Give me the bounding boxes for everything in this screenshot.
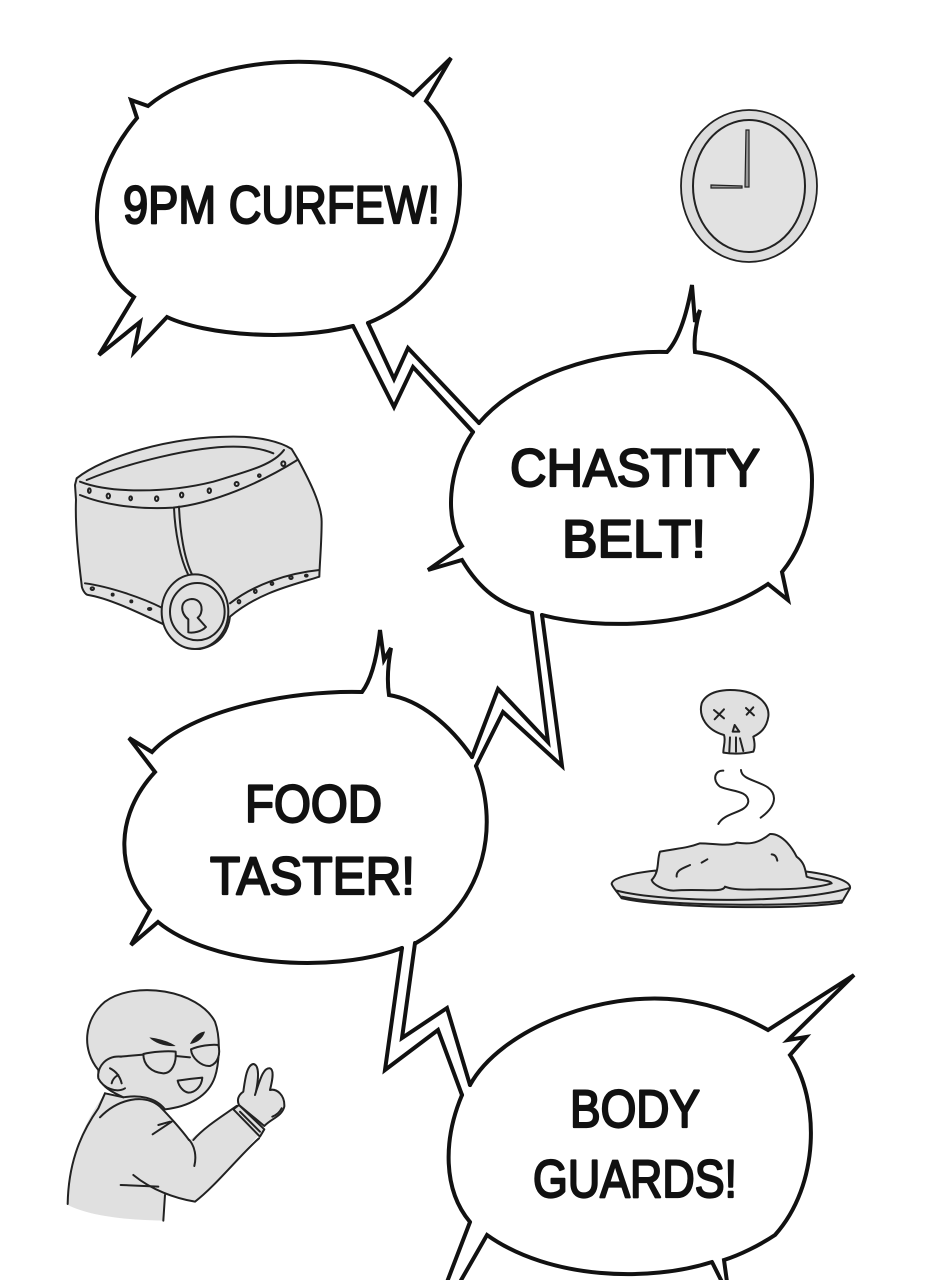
icon: poisoned food with skull <box>612 690 850 907</box>
heading: 9pm curfew: 9PM CURFEW! <box>123 176 440 235</box>
cuff <box>233 1105 264 1137</box>
brows <box>149 1037 176 1046</box>
body <box>68 1093 263 1221</box>
icon: clock <box>681 110 817 262</box>
heading: guards: GUARDS! <box>533 1150 737 1209</box>
head <box>87 990 219 1109</box>
arrow: lightning connector 2 <box>472 613 562 766</box>
mouth <box>178 1078 202 1093</box>
heading: body: BODY <box>570 1080 700 1139</box>
smell lines <box>715 771 748 824</box>
skull <box>701 690 768 754</box>
heading: food: FOOD <box>245 775 382 834</box>
glasses <box>143 1051 176 1073</box>
heading: chastity: CHASTITY <box>510 439 760 498</box>
speech bubble: 9pm curfew <box>97 58 460 355</box>
plate <box>612 871 850 907</box>
arrow: lightning connector 3 <box>385 943 470 1095</box>
ear <box>98 1057 125 1090</box>
speech bubble: body guards <box>447 975 854 1280</box>
heading: belt: BELT! <box>562 510 706 569</box>
hand <box>238 1064 284 1126</box>
icon: chastity belt <box>75 437 322 649</box>
heading: taster: TASTER! <box>210 847 415 906</box>
icon: man with glasses making peace sign <box>68 990 284 1221</box>
food <box>652 834 832 891</box>
arrow: lightning connector 1 <box>353 323 479 432</box>
speech bubble: food taster <box>124 630 487 963</box>
speech bubble: chastity belt <box>428 285 812 624</box>
